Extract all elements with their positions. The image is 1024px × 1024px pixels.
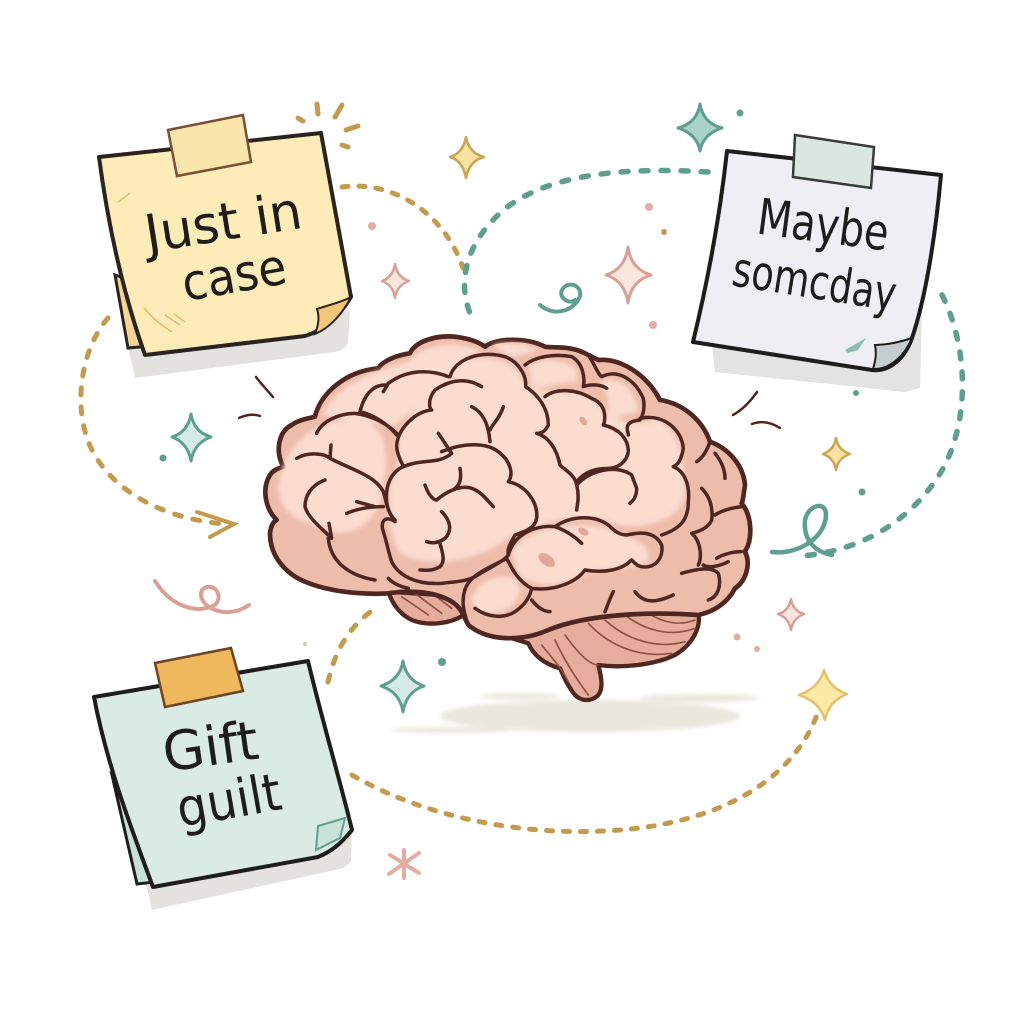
note text: Just in: [138, 181, 306, 266]
brain highlight spots: [536, 415, 590, 570]
note under-sheet: [112, 775, 155, 884]
note text: Gift: [159, 709, 262, 785]
sparkle: gold top: [450, 137, 484, 178]
squiggle: pink left: [155, 581, 249, 612]
sparkle: gold right: [823, 438, 850, 470]
note shadow: [128, 310, 350, 378]
note sheet: [99, 133, 351, 355]
dashed path: gift guilt note to brain: [328, 608, 376, 682]
note: just in case: [99, 115, 351, 378]
cerebellum folds: [402, 592, 695, 695]
dashed arrow: gift guilt note to star: [352, 700, 822, 832]
sparkle: teal bottom: [381, 661, 424, 712]
dashed path: maybe someday note to centre: [465, 171, 708, 322]
note: gift guilt: guilt: [172, 763, 286, 840]
note sheet: [94, 661, 352, 887]
sparkle: pink centre: [606, 247, 651, 303]
paper scuffs: [118, 193, 185, 332]
sparkle: teal left: [172, 414, 211, 461]
tape: [155, 648, 243, 707]
page curl: [315, 297, 351, 334]
curl accent: [845, 338, 866, 353]
note sheet: [693, 151, 941, 370]
note shadow: [145, 825, 352, 910]
asterisk: pink bottom: [389, 850, 419, 878]
dashed arrow: just in case note to brain: [81, 318, 234, 537]
tape: [793, 135, 874, 188]
brain stem and cerebellum: [388, 592, 699, 700]
dashed path: maybe someday note to brain: [800, 295, 962, 556]
sparkle: teal top right: [678, 104, 722, 151]
brain folds: [297, 354, 742, 625]
squiggle: teal centre: [540, 285, 580, 312]
tape: [168, 115, 251, 176]
sparkles: [172, 104, 850, 878]
dashed path: just in case note to centre: [342, 186, 463, 268]
note shadow: [712, 310, 922, 392]
brain: [265, 336, 750, 700]
note: maybe someday: [693, 135, 941, 392]
note under-sheet: [115, 275, 150, 348]
decorative squiggles and dots: [155, 104, 832, 612]
note: just in case: case: [177, 238, 291, 313]
motion marks: left of brain: [239, 377, 273, 418]
ground shadow: [390, 693, 760, 733]
note text: Maybe: [754, 188, 892, 263]
squiggle: teal right: [772, 506, 832, 555]
lit lobes: [278, 343, 685, 614]
motion marks: right of brain: [733, 392, 780, 428]
sparkle: gold arrow star: [799, 670, 847, 720]
sparkle: pink lower right: [778, 599, 804, 630]
burst: gold top: [298, 104, 358, 147]
page curl: [873, 338, 912, 369]
brain outline: [265, 336, 750, 638]
note: gift guilt: [94, 648, 352, 910]
page curl: [316, 818, 345, 850]
note: maybe someday: somcday: [729, 242, 900, 323]
dots: [160, 110, 866, 666]
sparkle: pink left: [382, 264, 409, 298]
